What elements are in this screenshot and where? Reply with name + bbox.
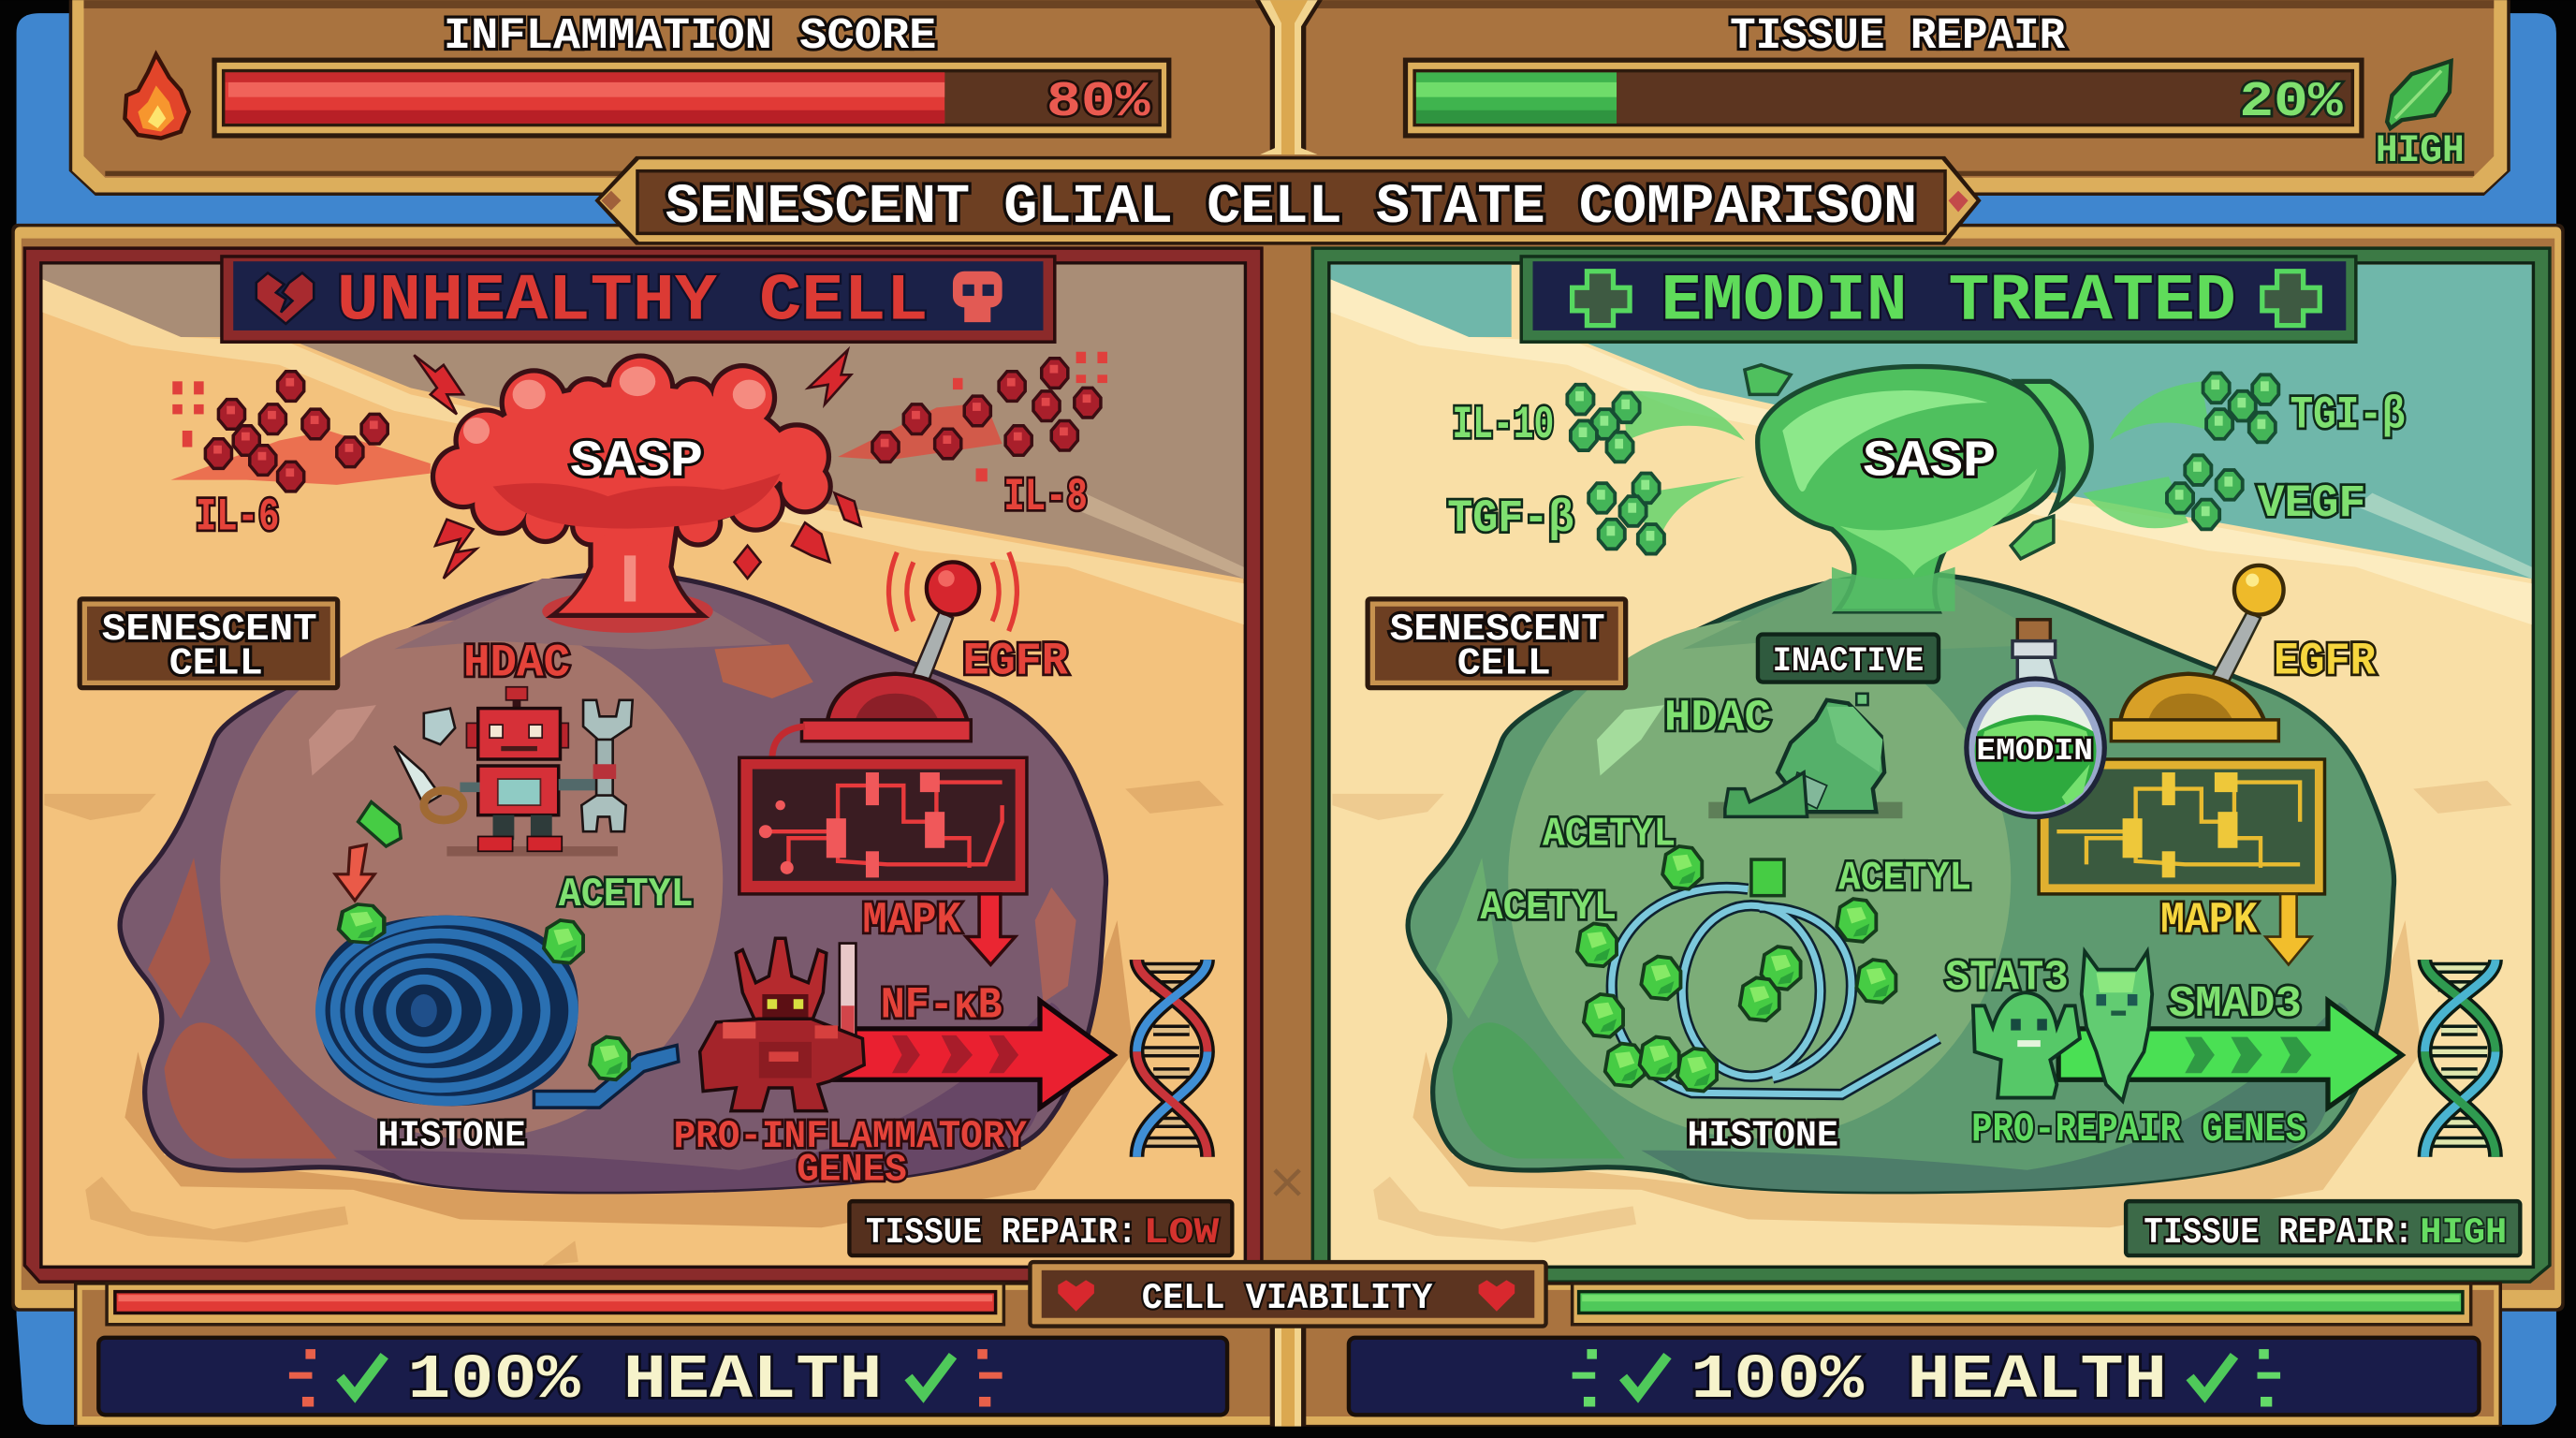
tag: tissue repair low [849, 1201, 1232, 1255]
label: IL-10: IL-10 [1453, 399, 1554, 451]
icon: skull [953, 271, 1003, 322]
title banner [594, 156, 1982, 245]
panel frame [24, 248, 1262, 1282]
label: acetyl: ACETYL [559, 872, 694, 918]
particles: VEGF [2167, 455, 2243, 529]
label: MAPK: MAPK [862, 896, 961, 946]
particles: TGF-beta [1588, 474, 1664, 554]
label: pro-repair genes: PRO-REPAIR GENES [1971, 1107, 2306, 1153]
header: emodin treated [1521, 257, 2356, 342]
icon: open histone [1577, 846, 1939, 1094]
status: right health: 100% HEALTH [1690, 1345, 2167, 1416]
label: EGFR: EGFR [2274, 636, 2376, 688]
label: SASP: SASP [1863, 433, 1996, 491]
icon: check [909, 1356, 953, 1395]
label: senescent cell: SENESCENT [1390, 609, 1605, 652]
header: unhealthy cell: UNHEALTHY CELL [337, 266, 929, 340]
header: unhealthy cell [222, 257, 1055, 342]
heading: inflammation score: INFLAMMATION SCORE [444, 12, 936, 62]
label: pro-inflammatory genes: PRO-INFLAMMATORY [674, 1114, 1028, 1159]
cell shadow [124, 920, 1134, 1227]
label: TGF-beta: TGF-β [1447, 492, 1573, 545]
label: pro-inflammatory genes: GENES [797, 1147, 907, 1192]
icon: emodin potion [1967, 620, 2104, 816]
label: HDAC: HDAC [1664, 694, 1771, 743]
icon: EGFR lever [772, 552, 1017, 759]
header: emodin treated: EMODIN TREATED [1661, 266, 2236, 340]
bar: inflammation 80%: 80% [1046, 74, 1150, 130]
stream: left red [171, 431, 431, 485]
icon: HDAC robot [394, 687, 633, 857]
arrow: MAPK to NF-kB [966, 894, 1016, 964]
particles: TGI-beta [2203, 374, 2278, 442]
status: right health [1349, 1338, 2479, 1416]
heading: tissue repair: TISSUE REPAIR [1730, 12, 2066, 62]
label: senescent cell: CELL [169, 643, 263, 686]
particles: IL-8 [872, 352, 1107, 481]
label: EGFR: EGFR [962, 636, 1068, 688]
stream: right red [838, 403, 1003, 461]
labels: acetyl: ACETYL [1838, 856, 1971, 902]
icon: sleeping robot [1708, 694, 1902, 818]
icon: sparks [1573, 1349, 2280, 1407]
panel: inflammation score [69, 0, 1288, 196]
icon: right heart [1479, 1280, 1515, 1312]
label: STAT3: STAT3 [1945, 954, 2069, 1003]
label: SMAD3: SMAD3 [2169, 980, 2302, 1030]
wisps: green [1623, 381, 2210, 539]
label: IL-8: IL-8 [1003, 471, 1088, 523]
label: NF-kB: NF-κB [881, 982, 1003, 1032]
icon: acetyl gem falling [359, 802, 401, 846]
particles: IL-10 [1567, 385, 1640, 462]
labels: acetyl: ACETYL [1480, 885, 1617, 932]
label: MAPK: MAPK [2160, 896, 2258, 946]
SASP explosion [431, 353, 833, 633]
arrow: SMAD3 gene activation [2058, 1001, 2402, 1108]
icon: right cross [2262, 271, 2320, 326]
bar: right viability [1573, 1284, 2471, 1325]
label: senescent cell: CELL [1457, 643, 1551, 686]
label: senescent cell: SENESCENT [102, 609, 317, 652]
divider: bottom centre stem [1270, 1325, 1306, 1427]
arrow: NF-kB gene activation [805, 1001, 1114, 1108]
bar: left viability [107, 1284, 1003, 1325]
chart: MAPK circuit [738, 756, 1029, 896]
tag: tissue repair high: TISSUE REPAIR: [2144, 1212, 2413, 1254]
icon: left heart [1058, 1280, 1094, 1312]
label: TGI-beta: TGI-β [2291, 389, 2405, 441]
label: SASP: SASP [570, 433, 703, 491]
tag: inactive: INACTIVE [1773, 642, 1924, 682]
panel frame [1312, 248, 2550, 1282]
sand background [1331, 265, 2532, 1266]
status: left health [98, 1338, 1227, 1416]
cell shadow [1412, 920, 2422, 1227]
sea shading [1331, 265, 2532, 624]
icon: flame [124, 54, 189, 139]
sea shading [43, 265, 1244, 624]
panel: viability left [74, 1282, 1288, 1427]
icon: check [340, 1356, 385, 1395]
tag: cell viability: CELL VIABILITY [1142, 1278, 1433, 1319]
label: histone: HISTONE [1687, 1115, 1838, 1156]
decoration: centre X [1275, 1170, 1299, 1195]
label: senescent cell [1365, 596, 1628, 690]
icon: emodin potion: EMODIN [1976, 734, 2093, 770]
chart: MAPK circuit [2037, 757, 2326, 896]
panel: main frame [11, 224, 2565, 1312]
sand background [43, 265, 1244, 1266]
particles: IL-6 [172, 372, 388, 492]
label: pro-inflammatory genes [674, 1114, 1028, 1192]
title text: SENESCENT GLIAL CELL STATE COMPARISON [666, 175, 1917, 239]
icon: leaf [2387, 61, 2452, 128]
icon: left cross [1573, 271, 1630, 326]
label: HDAC: HDAC [463, 637, 570, 689]
icon: broken heart [256, 272, 314, 324]
icon: DNA red [1137, 960, 1208, 1157]
icon: check [1623, 1356, 1667, 1395]
sand patches [1332, 781, 2512, 1242]
cell body [1408, 574, 2394, 1192]
panel: tissue repair [1288, 0, 2510, 196]
label: VEGF: VEGF [2258, 477, 2365, 530]
label: high: HIGH [2376, 128, 2465, 173]
labels: acetyl [1480, 811, 1971, 932]
icon: repair creatures [1973, 951, 2152, 1101]
bar: tissue repair 20%: 20% [2239, 74, 2343, 130]
icon: coiled histone [317, 904, 679, 1108]
SASP swirl [1745, 365, 2091, 611]
icon: DNA green [2425, 960, 2496, 1157]
tag: tissue repair low: LOW [1144, 1212, 1220, 1254]
bar: inflammation 80% [212, 58, 1171, 139]
arrow: MAPK to SMAD3 [2265, 894, 2311, 964]
panel: unhealthy cell [24, 248, 1262, 1282]
icons: lightning bolts [414, 350, 861, 579]
icon: EGFR lever gold [2111, 565, 2284, 741]
icon: sparks [289, 1349, 1003, 1407]
tag: tissue repair high: HIGH [2420, 1212, 2507, 1254]
status: left health: 100% HEALTH [407, 1345, 882, 1416]
tag: tissue repair low: TISSUE REPAIR: [866, 1212, 1137, 1254]
icon: red warrior [700, 938, 864, 1111]
tag: tissue repair high [2126, 1201, 2520, 1255]
label: histone: HISTONE [378, 1115, 526, 1156]
icon: check [2190, 1356, 2234, 1395]
labels: acetyl: ACETYL [1543, 811, 1676, 858]
divider: top centre stem [1255, 0, 1323, 154]
label: IL-6: IL-6 [196, 491, 279, 543]
cell body [120, 574, 1106, 1192]
tag: cell viability [1030, 1262, 1546, 1327]
arrow: acetyl removal [335, 844, 374, 901]
sand patches [44, 781, 1224, 1266]
panel: emodin treated [1312, 248, 2550, 1282]
panel: viability right [1288, 1282, 2502, 1427]
label: senescent cell [77, 596, 340, 690]
bar: tissue repair 20% [1403, 58, 2364, 139]
